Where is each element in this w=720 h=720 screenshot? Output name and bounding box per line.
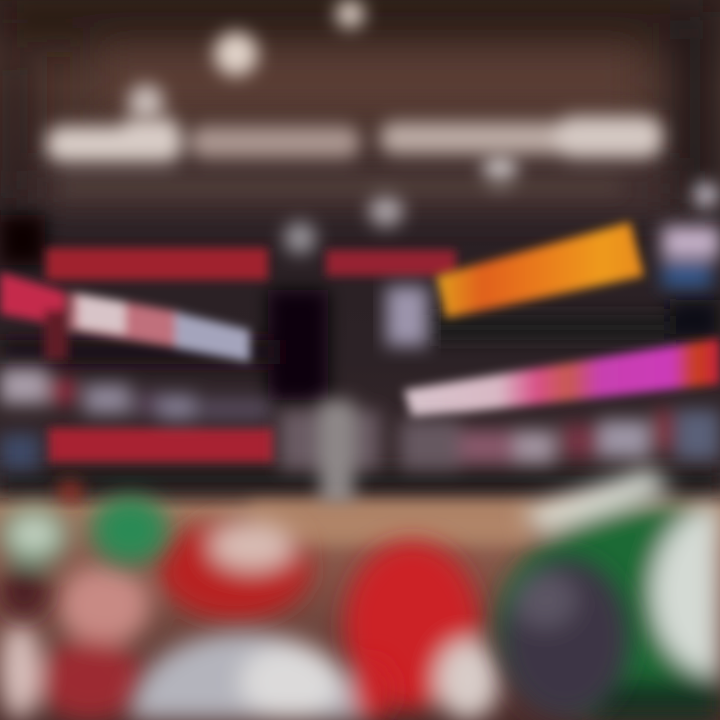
- foreground white jersey: [130, 632, 392, 720]
- left crowd rows: [0, 368, 270, 470]
- colourful right side banner: [662, 183, 720, 288]
- foreground green figures: [0, 468, 720, 720]
- pale screen: [386, 286, 428, 346]
- right crowd rows: [280, 400, 720, 510]
- blurred overhead sign: [46, 116, 663, 192]
- foreground red and white figures: [0, 520, 500, 720]
- ceiling with lights: [0, 0, 720, 254]
- dark central post and shadows: [0, 215, 720, 492]
- foreground dark head: [501, 558, 629, 718]
- red banners: [46, 248, 456, 462]
- orange banner: [436, 222, 644, 318]
- left striped banner: [0, 272, 250, 362]
- magenta banner: [404, 338, 720, 418]
- court floor: [60, 482, 530, 544]
